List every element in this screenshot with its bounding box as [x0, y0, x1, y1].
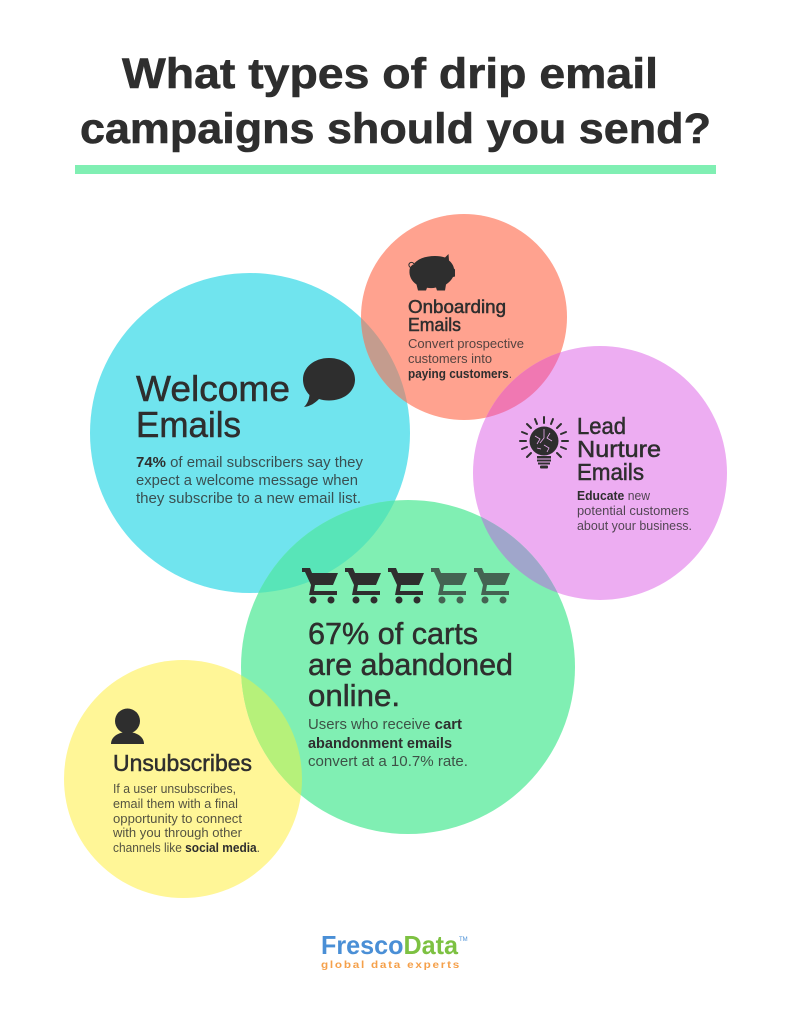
text: welcome body: 74% of email subscribers say they [136, 455, 364, 471]
circle: lead nurture emails [473, 346, 727, 600]
text: unsubscribes body [112, 782, 260, 855]
icon row: five shopping carts [302, 568, 510, 604]
title: What types of drip email [122, 50, 658, 98]
circle: onboarding emails [361, 214, 567, 420]
text: cart body: abandonment emails [308, 736, 452, 752]
logo: FrescoData [321, 930, 468, 971]
text: unsubscribes body: If a user unsubscribes, [113, 782, 236, 796]
icon: person [111, 708, 144, 744]
icon: brain light bulb [520, 417, 568, 468]
panel: cart abandonment [302, 568, 513, 770]
overlap: purple and green [480, 516, 558, 593]
icon: speech bubble [303, 358, 355, 407]
title [80, 50, 711, 153]
logo: FrescoData: global data experts [321, 960, 461, 971]
circle: cart abandonment [241, 500, 575, 834]
panel: welcome emails [136, 358, 364, 507]
text: onboarding body [408, 337, 524, 381]
text: cart body [308, 717, 468, 770]
text: unsubscribes body: opportunity to connect [113, 812, 243, 826]
overlap: yellow and green [241, 675, 302, 795]
text: welcome body: expect a welcome message when [136, 473, 358, 489]
logo: FrescoData: TM [459, 937, 468, 943]
heading: onboarding emails [408, 297, 506, 335]
text: onboarding body: customers into [408, 352, 492, 366]
heading: onboarding emails: Emails [408, 315, 461, 335]
panel: lead nurture emails [520, 413, 692, 533]
circle: welcome emails [90, 273, 410, 593]
text: cart body: convert at a 10.7% rate. [308, 754, 468, 770]
text: unsubscribes body: email them with a final [113, 797, 238, 811]
heading: lead nurture emails [577, 413, 661, 485]
heading: welcome emails: Welcome [136, 368, 290, 409]
text: lead nurture body: about your business. [577, 519, 692, 533]
heading: unsubscribes: Unsubscribes [113, 750, 252, 776]
text: unsubscribes body: channels like social media. [113, 841, 260, 855]
overlap: blue and green [258, 500, 395, 593]
text: unsubscribes body: with you through other [112, 826, 242, 840]
text: lead nurture body [577, 489, 692, 533]
circle: yellow unsubscribes [64, 660, 302, 898]
title: campaigns should you send? [80, 105, 711, 153]
overlap: orange and purple [486, 352, 561, 418]
logo: FrescoData: FrescoData [321, 930, 459, 960]
text: onboarding body: Convert prospective [408, 337, 524, 351]
heading: 67% of carts [308, 616, 513, 713]
text: lead nurture body: Educate new [577, 489, 651, 503]
heading: lead nurture emails: Lead [577, 413, 626, 439]
panel: unsubscribes [111, 708, 260, 855]
heading: 67% of carts: 67% of carts [308, 616, 478, 651]
text: cart body: Users who receive cart [308, 717, 462, 733]
heading: 67% of carts: are abandoned [308, 647, 513, 682]
heading: onboarding emails: Onboarding [408, 297, 506, 317]
heading: lead nurture emails: Emails [577, 459, 644, 485]
heading: lead nurture emails: Nurture [577, 436, 661, 462]
text: onboarding body: paying customers. [408, 367, 512, 381]
panel: onboarding emails [408, 254, 524, 381]
text: welcome body [136, 455, 364, 507]
overlap: blue and orange [361, 318, 408, 403]
text: welcome body: they subscribe to a new email list. [136, 491, 361, 507]
heading: welcome emails [136, 368, 290, 445]
title underline bar [75, 165, 716, 174]
text: lead nurture body: potential customers [577, 504, 689, 518]
icon: piggy bank [409, 254, 455, 290]
heading: 67% of carts: online. [308, 678, 400, 713]
heading: welcome emails: Emails [136, 404, 241, 445]
